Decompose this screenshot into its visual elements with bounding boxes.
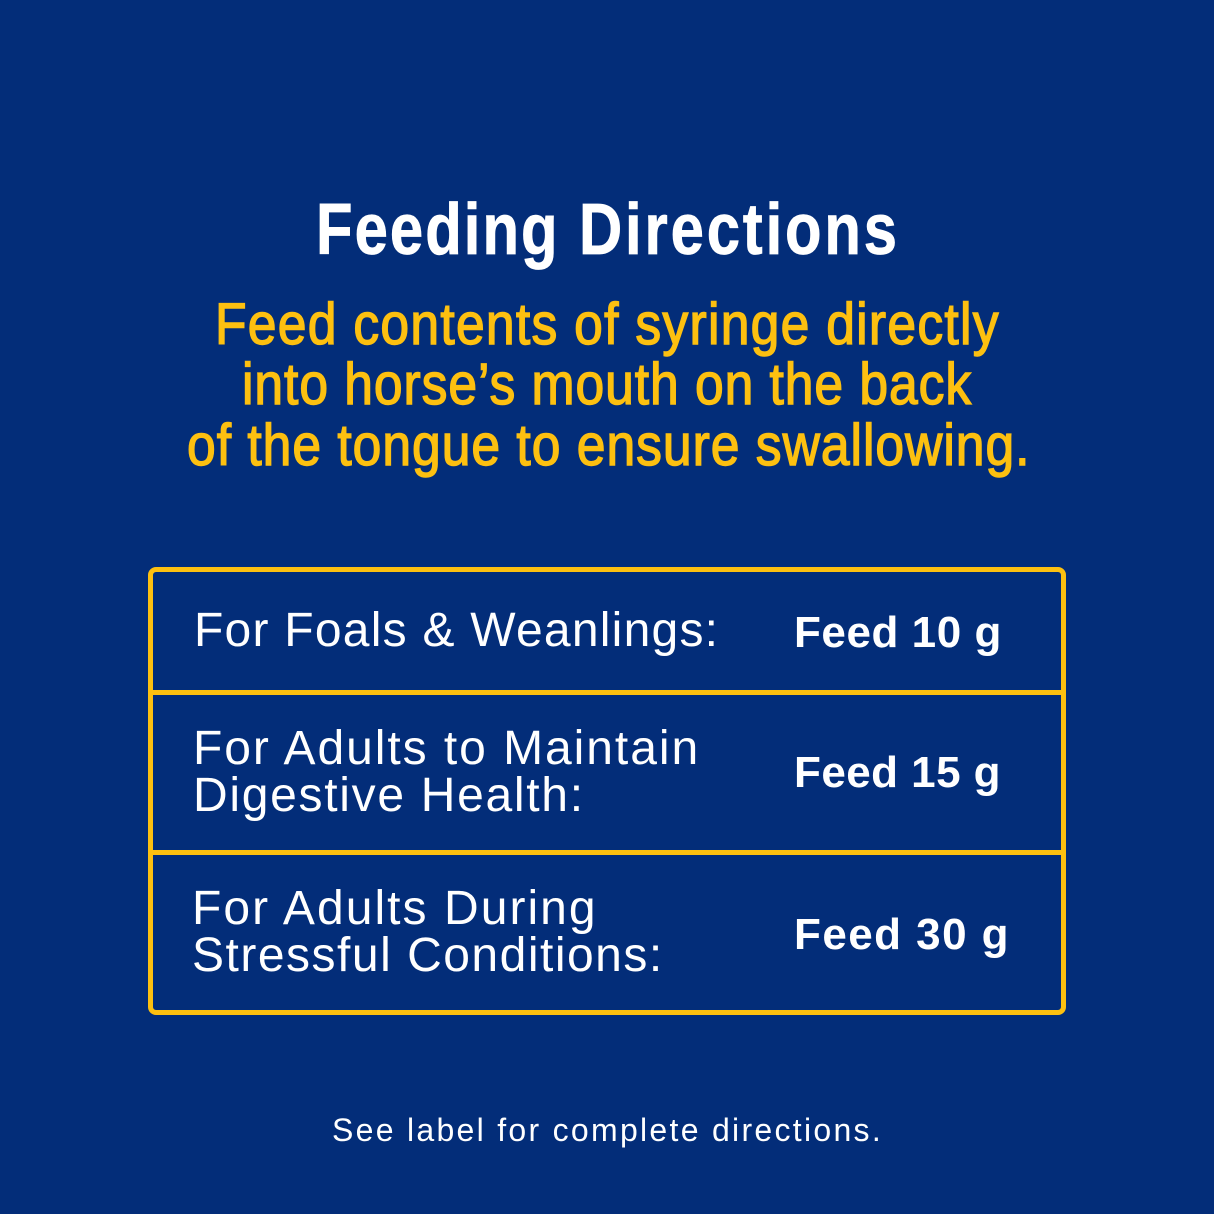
title: Feeding <box>316 190 560 270</box>
row 2 amount: Feed 15 g <box>794 748 1001 797</box>
row 3 label: For Adults During <box>192 882 598 935</box>
row 3 label: Stressful Conditions: <box>192 929 664 982</box>
subtitle: Feed contents of syringe directly <box>215 292 1000 357</box>
subtitle: into horse’s mouth on the back <box>242 352 972 417</box>
title <box>316 190 900 270</box>
row 1 amount: Feed 10 g <box>794 608 1002 657</box>
subtitle: of the tongue to ensure swallowing. <box>187 413 1031 478</box>
row 2 label: For Adults to Maintain <box>193 722 700 775</box>
row 1 label: For Foals & Weanlings: <box>194 604 719 657</box>
title: Directions <box>579 190 900 270</box>
row 2 label: Digestive Health: <box>193 769 585 822</box>
row 2 label <box>193 722 700 822</box>
subtitle <box>187 292 1031 478</box>
row 3 amount: Feed 30 g <box>794 910 1010 959</box>
row 3 label <box>192 882 664 982</box>
table panel <box>148 567 1066 1015</box>
footnote: See label for complete directions. <box>332 1112 883 1148</box>
